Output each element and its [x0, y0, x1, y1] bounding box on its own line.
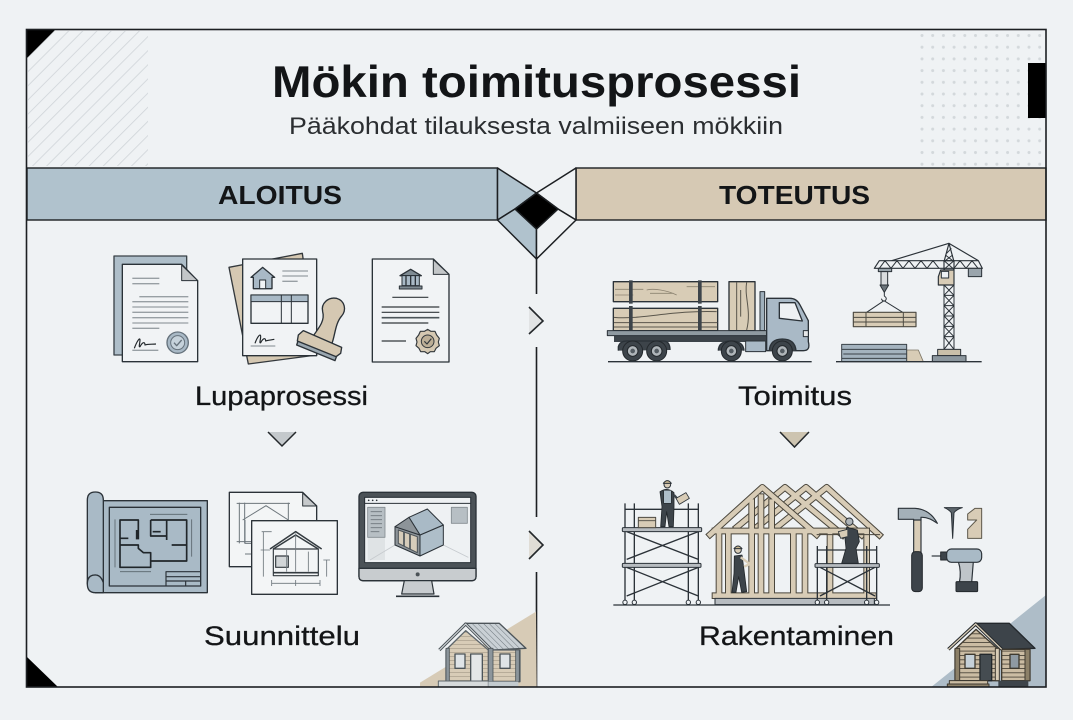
- blue corner triangle: [932, 595, 1046, 687]
- decorative dots: [920, 33, 1045, 166]
- icons: construction: [613, 481, 982, 605]
- label: Toimitus: Toimitus: [738, 381, 852, 411]
- arrow: right chevron upper: [529, 307, 543, 334]
- corner triangle and cabin right: [932, 595, 1046, 687]
- beige corner triangle: [420, 612, 537, 687]
- banner: toteutus: TOTEUTUS: [719, 182, 870, 210]
- title: Mökin toimitusprosessi: [272, 58, 801, 107]
- banner: toteutus: [576, 168, 1046, 220]
- label: Rakentaminen: Rakentaminen: [699, 621, 894, 651]
- center diamond connector: [498, 168, 576, 259]
- icon: worker on scaffold: [660, 481, 689, 527]
- icon: building permit with stamp: [229, 253, 344, 364]
- icon: official certificate: [372, 259, 449, 362]
- icons: permit documents: [114, 253, 449, 364]
- corner triangle top left: [27, 30, 55, 58]
- arrow: down left: [268, 432, 296, 446]
- icon: house drawings: [229, 492, 337, 594]
- icon: tower crane: [836, 243, 982, 362]
- icon: 3D model on monitor: [359, 492, 476, 596]
- icon: dark cabin: [947, 623, 1035, 687]
- icon: light cabin: [438, 623, 526, 687]
- icon: worker on ground: [732, 546, 750, 592]
- icon: floor plan blueprint: [87, 492, 207, 593]
- icon: timber house frame: [710, 487, 880, 605]
- icon: hammer: [898, 508, 937, 592]
- arrow: down right: [780, 432, 809, 447]
- icons: design: [87, 492, 476, 596]
- arrow: right chevron lower: [529, 531, 543, 559]
- icon: bracket: [968, 508, 982, 538]
- icon: scaffold and workers on frame: [613, 518, 890, 605]
- black side bar: [1028, 63, 1046, 118]
- subtitle: Pääkohdat tilauksesta valmiiseen mökkiin: [289, 113, 783, 140]
- icon: power drill: [932, 549, 982, 592]
- label: Lupaprosessi: Lupaprosessi: [195, 381, 368, 411]
- corner triangle bottom left: [27, 657, 58, 687]
- icon: nail: [944, 508, 962, 538]
- corner triangle and cabin left: [420, 612, 537, 687]
- icon: worker on right scaffold: [838, 518, 859, 563]
- icon: timber truck: [607, 280, 812, 362]
- icon: signed document: [114, 256, 198, 362]
- icon: scaffolding with worker: [622, 481, 702, 604]
- decorative stripes: [28, 31, 148, 166]
- icons: delivery: [607, 243, 982, 362]
- banner: aloitus: [27, 168, 498, 220]
- banner: aloitus: ALOITUS: [218, 182, 342, 210]
- vertical divider: [536, 259, 538, 687]
- label: Suunnittelu: Suunnittelu: [204, 621, 360, 651]
